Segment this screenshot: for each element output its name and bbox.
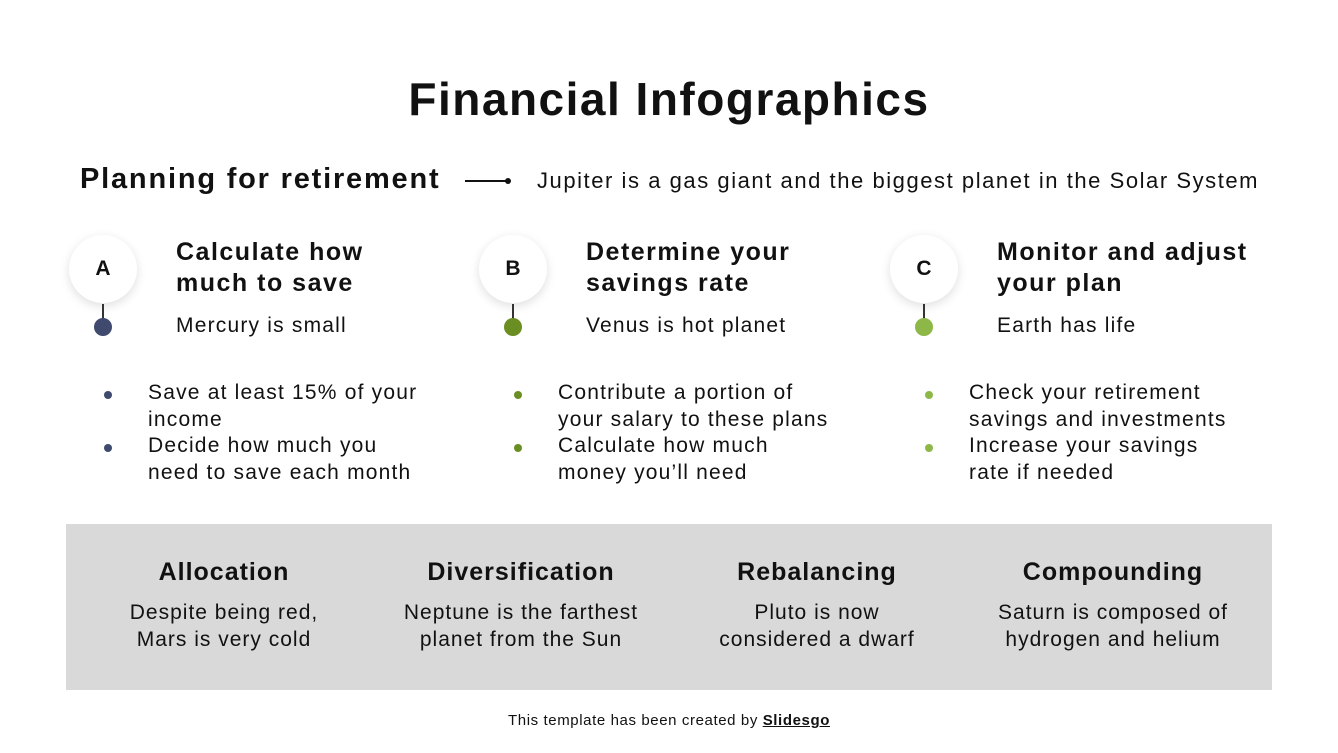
marker dot [504,318,522,336]
heading B: Determine your [586,238,790,266]
subtext B: Venus is hot planet [586,314,786,337]
concept: Diversification: Neptune is the farthest [404,601,638,624]
icon: circle B [479,235,547,303]
bullets C: Check your retirement [969,381,1201,404]
heading C: your plan [997,269,1123,297]
bullets A [148,381,417,484]
bullets C [969,381,1227,484]
heading C [997,238,1248,297]
subtitle: Planning for retirement [80,163,440,195]
concept: Compounding [998,558,1228,651]
subtext A: Mercury is small [176,314,347,337]
concept: Rebalancing: Pluto is now [754,601,880,624]
concept: Rebalancing [719,558,915,651]
bullets B: Contribute a portion of [558,381,793,404]
bullets A: Save at least 15% of your [148,381,417,404]
concept: Diversification [404,558,638,651]
concept: Diversification: Diversification [427,558,615,586]
footer credit: This template has been created by Slidesgo [508,712,830,729]
title: Financial Infographics [408,73,930,125]
bullets B: money you’ll need [558,460,748,484]
subtitle description: Jupiter is a gas giant and the biggest planet in the Solar System [537,168,1259,193]
bullets C: Increase your savings [969,434,1198,457]
icon: circle B: B [505,257,521,280]
heading A [176,238,364,297]
heading A: much to save [176,269,354,297]
bullets B: your salary to these plans [558,408,828,430]
column A [66,238,417,484]
concept: Compounding: hydrogen and helium [1005,628,1221,651]
heading B [586,238,790,297]
bullets B: Calculate how much [558,434,769,457]
bullets A: Decide how much you [148,434,377,457]
concept: Allocation: Allocation [159,558,289,586]
bullets C: rate if needed [969,460,1114,484]
heading A: Calculate how [176,238,364,266]
concept: Rebalancing: considered a dwarf [719,628,915,651]
bullets A: income [148,408,223,430]
icon: circle C: C [916,257,932,280]
icon: circle A [69,235,137,303]
concept: Diversification: planet from the Sun [420,628,622,651]
arrow [465,180,509,182]
icon: circle C [890,235,958,303]
bullets A: need to save each month [148,460,411,484]
concept: Compounding: Saturn is composed of [998,601,1228,624]
heading B: savings rate [586,269,750,297]
concept: Allocation: Despite being red, [130,601,318,624]
concept: Compounding: Compounding [1023,558,1203,586]
column B [476,238,828,484]
marker dot [915,318,933,336]
column C [888,238,1248,484]
concept: Allocation [130,558,318,651]
bullets B [558,381,828,484]
panel: concepts [66,524,1272,690]
icon: circle A: A [95,257,111,280]
marker dot [94,318,112,336]
bullets C: savings and investments [969,408,1227,430]
subtext C: Earth has life [997,314,1136,337]
concept: Allocation: Mars is very cold [137,628,311,651]
concept: Rebalancing: Rebalancing [737,558,897,586]
heading C: Monitor and adjust [997,238,1248,266]
